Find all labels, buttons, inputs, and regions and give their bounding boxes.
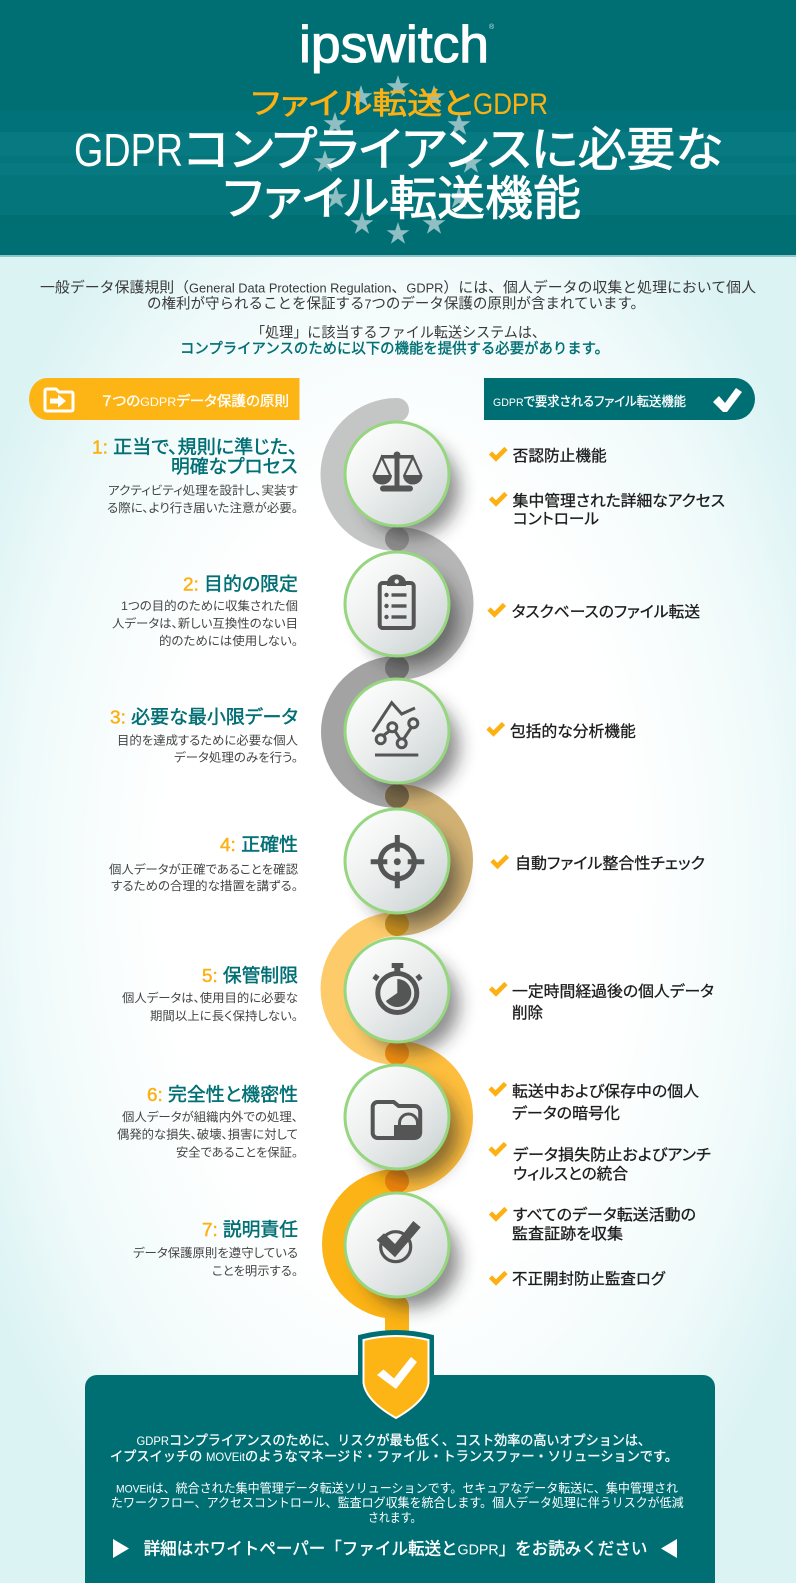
- feature: DLP and antivirus: ウィルスとの統合: [513, 1165, 628, 1183]
- principle 7: 7: 説明責任: [202, 1219, 298, 1240]
- principle 2: 人データは、新しい互換性のない目: [112, 616, 298, 630]
- feature: encryption: [490, 1083, 700, 1123]
- logo: ®: [489, 23, 495, 31]
- footer lead text: GDPRコンプライアンスのために、リスクが最も低く、コスト効率の高いオプションは、: [136, 1432, 651, 1448]
- principle 2: 2: 目的の限定: [183, 573, 298, 594]
- principle 4: するための合理的な措置を講ずる。: [111, 878, 298, 893]
- principle 1: [92, 437, 299, 515]
- intro text: の権利が守られることを保証する7つのデータ保護の原則が含まれています。: [147, 294, 645, 312]
- right column: required features: [488, 447, 725, 1288]
- intro text: 一般データ保護規則（ General Data Protection Regulation 、GDPR）には、個人データの収集と処理において個人: [40, 278, 756, 296]
- principle 1: 明確なプロセス: [171, 456, 298, 477]
- disc shadows: [363, 441, 459, 1308]
- feature: task-based transfer: タスクベースのファイル転送: [512, 603, 700, 621]
- feature: timed deletion: 削除: [512, 1004, 543, 1022]
- feature: timed deletion: [490, 982, 714, 1022]
- footer lead text: イプスイッチの MOVEitのようなマネージド・ファイル・トランスファー・ソリューションです。: [110, 1449, 678, 1464]
- principle 4: 個人データが正確であることを確認: [109, 862, 298, 876]
- title: GDPR: [74, 124, 183, 176]
- footer body text: MOVEitは、統合された集中管理データ転送ソリューションです。セキュアなデータ転送に、集中管理され: [116, 1480, 678, 1496]
- feature: centralized access control: 集中管理された詳細なアクセス: [513, 492, 725, 510]
- principle 7: ことを明示する。: [212, 1264, 298, 1278]
- principle 7: [133, 1219, 298, 1278]
- right column header bar: [484, 378, 755, 420]
- call to action line: 詳細はホワイトペーパー「ファイル転送とGDPR」をお読みください: [144, 1540, 647, 1558]
- principle 2: 的のためには使用しない。: [159, 633, 298, 648]
- principle 6: [117, 1084, 298, 1160]
- principle 5: 個人データは、使用目的に必要な: [122, 990, 298, 1005]
- feature: audit trail: [490, 1205, 696, 1243]
- right column header bar: GDPRで要求されるファイル転送機能: [493, 394, 686, 409]
- principle 6: 偶発的な損失、破壊、損害に対して: [117, 1126, 298, 1142]
- winding ribbon: [332, 410, 462, 1345]
- feature: timed deletion: 一定時間経過後の個人データ: [512, 982, 714, 1001]
- principle 5: 5: 保管制限: [202, 965, 298, 986]
- principle 3: 目的を達成するために必要な個人: [117, 732, 298, 748]
- principle 5: [122, 965, 298, 1023]
- left column header bar: [29, 378, 300, 420]
- intro text: [40, 278, 756, 358]
- title: [74, 123, 723, 225]
- feature: tamper-evident log: 不正開封防止監査ログ: [512, 1270, 666, 1288]
- feature: analytics: 包括的な分析機能: [510, 723, 636, 741]
- logo: ipswitch: [299, 16, 489, 74]
- feature: encryption: 転送中および保存中の個人: [512, 1083, 700, 1101]
- principle 3: データ処理のみを行う。: [174, 750, 298, 764]
- feature: non-repudiation: 否認防止機能: [513, 447, 607, 465]
- discs: [345, 422, 449, 1297]
- icon: clipboard: [380, 574, 414, 628]
- header banner: [0, 0, 796, 257]
- icon: line chart: [373, 703, 418, 755]
- feature: audit trail: 監査証跡を収集: [512, 1225, 623, 1243]
- feature: integrity check: 自動ファイル整合性チェック: [515, 855, 705, 873]
- feature: DLP and antivirus: データ損失防止およびアンチ: [513, 1145, 711, 1164]
- principle 4: [109, 834, 298, 893]
- principle 1: アクティビティ処理を設計し、実装す: [108, 482, 299, 498]
- feature: DLP and antivirus: [490, 1144, 711, 1183]
- intro text: コンプライアンスのために以下の機能を提供する必要があります。: [180, 340, 609, 358]
- icon: EU ring of stars: [314, 75, 482, 244]
- icon: stopwatch: [374, 963, 421, 1012]
- icon: check in circle: [377, 1221, 421, 1262]
- icon: scales: [372, 452, 422, 492]
- principle 6: 6: 完全性と機密性: [147, 1084, 298, 1105]
- principle 1: 1: 正当で、規則に準じた、: [92, 437, 298, 458]
- feature: centralized access control: [490, 492, 725, 528]
- principle 3: 3: 必要な最小限データ: [110, 707, 298, 728]
- footer body text: されます。: [368, 1511, 421, 1525]
- title: コンプライアンスに必要な: [184, 123, 723, 176]
- principle 6: 安全であることを保証。: [176, 1146, 298, 1160]
- principle 2: 1つの目的のために収集された個: [121, 598, 298, 613]
- left column header bar: ７つのGDPRデータ保護の原則: [102, 393, 289, 409]
- feature: centralized access control: コントロール: [513, 511, 599, 528]
- footer body text: [111, 1480, 684, 1525]
- principle 3: [110, 707, 298, 764]
- icon: white check: [713, 388, 742, 412]
- principle 7: データ保護原則を遵守している: [133, 1245, 298, 1260]
- subtitle: GDPR: [473, 88, 548, 121]
- icon: folder with arrow: [45, 389, 73, 411]
- icon: crosshair target: [371, 835, 424, 888]
- footer body text: たワークフロー、アクセスコントロール、監査ログ収集を統合します。個人データ処理に伴うリスクが低減: [111, 1495, 684, 1510]
- subtitle: ファイル転送と: [251, 88, 473, 121]
- feature: audit trail: すべてのデータ転送活動の: [513, 1205, 696, 1224]
- icon: shield with check: [359, 1331, 433, 1423]
- left column: seven principles: [92, 437, 299, 1278]
- footer lead text: [110, 1432, 678, 1464]
- title: ファイル転送機能: [223, 172, 581, 225]
- intro text: 「処理」に該当するファイル転送システムは、: [251, 324, 546, 342]
- feature: encryption: データの暗号化: [512, 1104, 620, 1123]
- principle 1: る際に、より行き届いた注意が必要。: [107, 500, 298, 515]
- principle 5: 期間以上に長く保持しない。: [150, 1008, 298, 1023]
- principle 4: 4: 正確性: [220, 834, 298, 855]
- ribbon joints: [385, 527, 409, 1193]
- icon: folder with padlock: [373, 1102, 422, 1139]
- panel: footer call to action: [85, 1375, 715, 1583]
- principle 6: 個人データが組織内外での処理、: [122, 1109, 298, 1124]
- principle 2: [112, 573, 298, 648]
- subtitle: [251, 88, 548, 121]
